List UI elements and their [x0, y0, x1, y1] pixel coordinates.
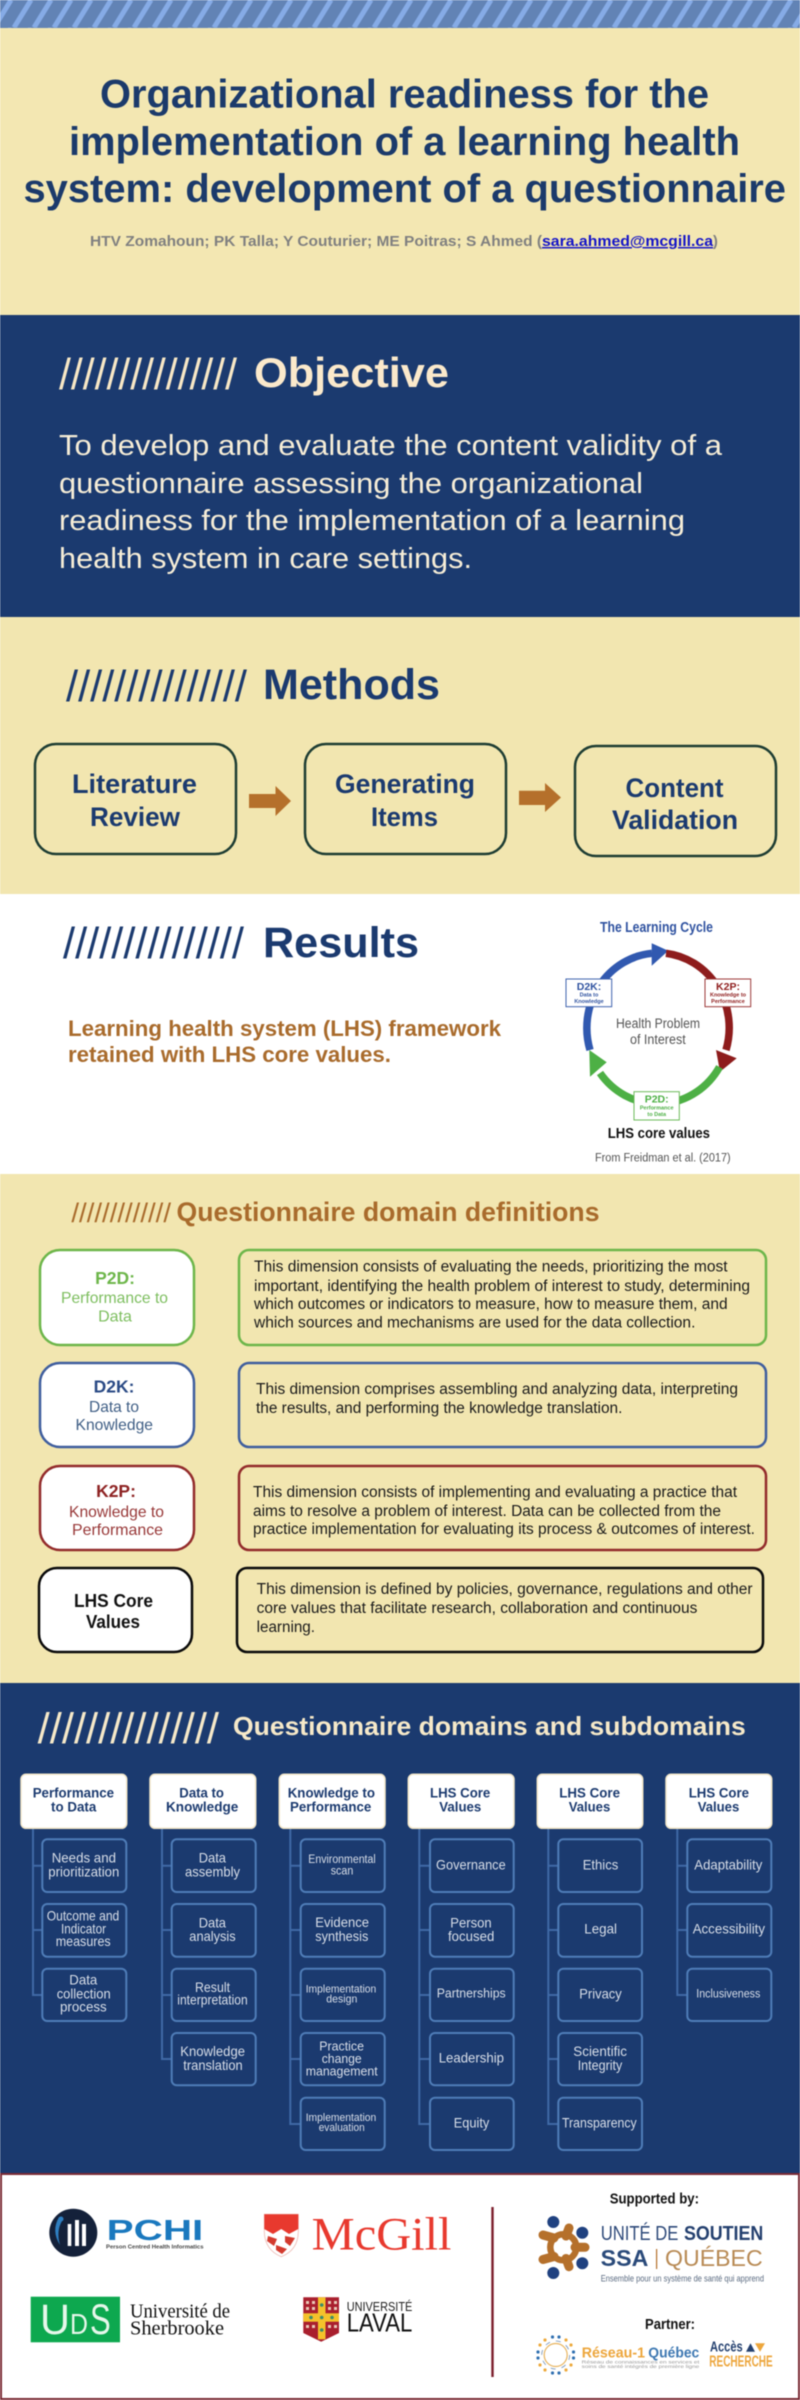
- definition text: LHS core values: [237, 1568, 763, 1652]
- column: data to knowledge: analysis: [189, 1928, 236, 1944]
- column: knowledge to performance: Knowledge to: [288, 1786, 375, 1800]
- column: data to knowledge: Data to: [179, 1786, 224, 1800]
- heading: domains: ///////////////: [38, 1705, 219, 1753]
- diagram: the learning cycle: D2K:: [577, 981, 601, 993]
- heading: objective: ///////////////: [59, 350, 238, 399]
- diagram: the learning cycle: [566, 920, 751, 1120]
- column: LHS core values 2: [537, 1774, 643, 2150]
- caption: LHS core values: [595, 1126, 731, 1165]
- caption: LHS core values: From Freidman et al. (2017): [595, 1153, 731, 1165]
- step: generating items: Items: [371, 802, 438, 832]
- column: performance to data: measures: [56, 1933, 111, 1949]
- title: system: development of a questionnaire: [24, 167, 786, 211]
- column: LHS core values 1: [408, 1774, 514, 2150]
- heading: methods: Methods: [263, 661, 440, 709]
- column: knowledge to performance: Environmental: [308, 1854, 376, 1866]
- divider: [491, 2207, 494, 2377]
- heading: results: Results: [263, 919, 419, 967]
- column: knowledge to performance: Implementation: [306, 2112, 376, 2124]
- authors: ): [713, 234, 718, 250]
- definition label: D2K: Data to: [89, 1399, 139, 1416]
- column: knowledge to performance: scan: [331, 1866, 353, 1878]
- column: LHS core values 1: LHS Core: [430, 1786, 491, 1800]
- logo: Université Laval: UNIVERSITÉ: [347, 2299, 413, 2314]
- objective text: health system in care settings.: [59, 543, 472, 575]
- column: LHS core values 1: Governance: [436, 1856, 506, 1872]
- definition text: LHS core values: learning.: [257, 1619, 315, 1636]
- logo: Université de Sherbrooke: S: [90, 2296, 111, 2344]
- diagram: the learning cycle: Knowledge: [574, 999, 604, 1005]
- panel: footer logos: [1, 2174, 799, 2399]
- logo: Réseau-1 Québec: soins de santé intégrés de première ligne: [582, 2364, 700, 2369]
- definition text: LHS core values: core values that facilitate research, collaboration and continuous: [257, 1600, 698, 1617]
- step: content validation: [575, 746, 776, 856]
- column: knowledge to performance: design: [326, 1994, 357, 2006]
- definition text: P2D: [239, 1250, 766, 1345]
- definition text: D2K: [239, 1363, 766, 1447]
- diagram: the learning cycle: P2D:: [645, 1094, 669, 1106]
- column: LHS core values 2: Ethics: [583, 1856, 618, 1872]
- logo: Université de Sherbrooke: Université de: [130, 2300, 230, 2322]
- arrow: [249, 786, 291, 816]
- diagram: the learning cycle: Performance: [711, 999, 745, 1005]
- column: LHS core values 2: LHS Core: [559, 1786, 620, 1800]
- logo: Réseau-1 Québec: Réseau-1: [582, 2345, 645, 2362]
- logo: Accès Recherche: Accès: [710, 2339, 743, 2356]
- diagram: the learning cycle: Data to: [580, 992, 599, 998]
- title: implementation of a learning health: [69, 120, 740, 164]
- top stripe band: [0, 0, 800, 28]
- panel: methods: [0, 617, 800, 894]
- heading: objective: [59, 349, 449, 399]
- column: LHS core values 1: Values: [439, 1800, 481, 1815]
- diagram: the learning cycle: Health Problem: [616, 1016, 700, 1031]
- definition text: D2K: This dimension comprises assembling and analyzing data, interpreting: [256, 1381, 738, 1398]
- column: LHS core values 3: LHS Core: [689, 1786, 749, 1800]
- definition label: P2D: P2D:: [95, 1268, 135, 1288]
- column: LHS core values 1: focused: [448, 1928, 494, 1944]
- authors: sara.ahmed@mcgill.ca: [542, 234, 714, 250]
- diagram: the learning cycle: K2P:: [716, 981, 740, 993]
- definition text: K2P: aims to resolve a problem of interest. Data can be collected from the: [253, 1503, 721, 1520]
- logo: Université de Sherbrooke: U: [40, 2296, 70, 2344]
- authors: [90, 234, 718, 250]
- column: performance to data: Performance: [33, 1786, 114, 1800]
- panel: objective: [0, 315, 800, 617]
- authors: HTV Zomahoun; PK Talla; Y Couturier; ME Poitras; S Ahmed (: [90, 234, 542, 250]
- label: supported by: Supported by:: [610, 2191, 699, 2207]
- column: knowledge to performance: [279, 1774, 385, 2150]
- diagram: the learning cycle: of Interest: [630, 1032, 686, 1047]
- diagram: the learning cycle: Performance: [640, 1106, 674, 1112]
- heading: objective: Objective: [254, 349, 449, 396]
- heading: definitions: /////////////: [71, 1198, 171, 1228]
- column: performance to data: process: [60, 1999, 107, 2015]
- heading: results: ///////////////: [63, 919, 245, 968]
- logo: McGill: McGill: [312, 2208, 452, 2260]
- column: data to knowledge: Data: [199, 1914, 226, 1930]
- column: performance to data: [21, 1774, 127, 2021]
- logo: Accès Recherche: [709, 2339, 773, 2371]
- definition text: P2D: This dimension consists of evaluating the needs, prioritizing the most: [254, 1259, 728, 1276]
- logo: PCHI: Person Centred Health Informatics: [106, 2245, 204, 2251]
- column: LHS core values 1: Equity: [454, 2114, 489, 2130]
- results text: Learning health system (LHS) framework: [68, 1016, 501, 1041]
- definition label: LHS core values: LHS Core: [74, 1591, 153, 1611]
- definition label: LHS core values: Values: [86, 1612, 140, 1632]
- column: LHS core values 3: Accessibility: [693, 1921, 765, 1937]
- definition label: D2K: [40, 1363, 194, 1447]
- panel: results: [0, 894, 800, 1174]
- objective text: readiness for the implementation of a learning: [59, 505, 685, 537]
- definition label: K2P: K2P:: [96, 1481, 136, 1501]
- definition label: K2P: Performance: [72, 1522, 163, 1539]
- diagram: the learning cycle: to Data: [647, 1112, 667, 1118]
- column: LHS core values 1: Partnerships: [437, 1986, 506, 2001]
- definition text: P2D: which sources and mechanisms are used for the data collection.: [253, 1315, 695, 1332]
- definition label: LHS core values: [39, 1568, 192, 1652]
- step: generating items: Generating: [335, 769, 475, 799]
- definition text: K2P: practice implementation for evaluating its process & outcomes of interest.: [253, 1521, 755, 1538]
- panel: title: [0, 28, 800, 315]
- diagram: the learning cycle: Knowledge to: [710, 992, 747, 998]
- column: data to knowledge: assembly: [185, 1864, 240, 1880]
- heading: domains: [38, 1705, 746, 1753]
- definition label: K2P: Knowledge to: [69, 1504, 164, 1521]
- definition text: K2P: [239, 1466, 766, 1550]
- column: LHS core values 3: [666, 1774, 772, 2021]
- column: LHS core values 1: Leadership: [439, 2050, 504, 2066]
- step: content validation: Content: [626, 773, 724, 803]
- step: literature review: [35, 744, 236, 854]
- heading: domains: Questionnaire domains and subdomains: [233, 1713, 746, 1741]
- logo: unité de soutien SSA Québec: SOUTIEN: [684, 2223, 763, 2245]
- column: performance to data: prioritization: [48, 1864, 119, 1880]
- caption: LHS core values: LHS core values: [608, 1126, 710, 1142]
- column: data to knowledge: Knowledge: [180, 2043, 245, 2059]
- logo: PCHI: [49, 2209, 204, 2257]
- step: content validation: Validation: [612, 805, 738, 835]
- logo: unité de soutien SSA Québec: UNITÉ DE: [601, 2222, 678, 2245]
- logo: Université de Sherbrooke: D: [70, 2309, 88, 2341]
- logo: Réseau-1 Québec: Réseau de connaissances en services et: [582, 2359, 700, 2364]
- column: LHS core values 2: Values: [569, 1800, 610, 1815]
- column: data to knowledge: Knowledge: [166, 1800, 239, 1815]
- definition text: LHS core values: This dimension is defined by policies, governance, regulations and other: [257, 1581, 753, 1598]
- column: performance to data: to Data: [51, 1800, 97, 1815]
- heading: methods: ///////////////: [66, 662, 248, 711]
- column: knowledge to performance: Practice: [319, 2039, 364, 2054]
- step: literature review: Literature: [72, 769, 197, 799]
- panel: questionnaire domains and subdomains: [0, 1683, 800, 2173]
- objective text: questionnaire assessing the organizational: [59, 468, 643, 500]
- column: LHS core values 2: Scientific: [573, 2043, 627, 2059]
- objective text: [59, 430, 723, 575]
- column: LHS core values 2: Integrity: [578, 2057, 622, 2073]
- column: knowledge to performance: change: [322, 2051, 362, 2066]
- column: performance to data: Data: [69, 1971, 97, 1987]
- panel: questionnaire domain definitions: [0, 1174, 800, 1683]
- column: LHS core values 3: Inclusiveness: [696, 1988, 761, 2000]
- title: Organizational readiness for the: [100, 72, 709, 116]
- column: data to knowledge: translation: [183, 2057, 243, 2073]
- logo: unité de soutien SSA Québec: SSA: [601, 2245, 648, 2271]
- step: literature review: Review: [90, 802, 180, 832]
- logo: unité de soutien SSA Québec: [543, 2216, 764, 2285]
- column: performance to data: Needs and: [52, 1850, 116, 1866]
- heading: definitions: Questionnaire domain definitions: [176, 1197, 600, 1227]
- logo: Université de Sherbrooke: Sherbrooke: [130, 2317, 224, 2339]
- definition label: P2D: Performance to: [61, 1290, 168, 1307]
- logo: Université Laval: LAVAL: [347, 2310, 412, 2338]
- heading: results: [63, 919, 419, 968]
- definition text: P2D: which outcomes or indicators to measure, how to measure them, and: [253, 1296, 728, 1313]
- heading: methods: [66, 661, 440, 711]
- column: knowledge to performance: Performance: [290, 1800, 372, 1815]
- column: performance to data: Indicator: [61, 1920, 106, 1936]
- column: performance to data: Outcome and: [47, 1908, 119, 1924]
- logo: unité de soutien SSA Québec: QUÉBEC: [665, 2245, 763, 2271]
- arrow: [519, 783, 561, 812]
- logo: PCHI: PCHI: [107, 2215, 203, 2247]
- objective text: To develop and evaluate the content validity of a: [59, 430, 723, 462]
- column: data to knowledge: Data: [199, 1850, 226, 1866]
- diagram: the learning cycle: The Learning Cycle: [600, 920, 713, 936]
- column: data to knowledge: [150, 1774, 256, 2085]
- definition label: P2D: Data: [98, 1309, 132, 1326]
- logo: Réseau-1 Québec: Québec: [648, 2345, 699, 2362]
- column: LHS core values 3: Adaptability: [694, 1856, 762, 1872]
- definition text: D2K: the results, and performing the knowledge translation.: [256, 1400, 622, 1417]
- definition label: D2K: Knowledge: [76, 1417, 153, 1434]
- definition label: K2P: [40, 1466, 194, 1550]
- column: data to knowledge: Result: [195, 1979, 230, 1995]
- results text: retained with LHS core values.: [68, 1042, 391, 1067]
- title: [24, 72, 786, 211]
- column: LHS core values 2: Legal: [584, 1921, 617, 1937]
- results text: [68, 1016, 501, 1067]
- logo: Université Laval: [303, 2297, 413, 2342]
- logo: Réseau-1 Québec: [536, 2335, 700, 2375]
- definition label: D2K: D2K:: [94, 1377, 134, 1397]
- logo: Université de Sherbrooke: [31, 2296, 230, 2344]
- column: knowledge to performance: Evidence: [315, 1914, 369, 1930]
- column: performance to data: collection: [57, 1985, 111, 2001]
- definition text: K2P: This dimension consists of implementing and evaluating a practice that: [253, 1484, 738, 1501]
- column: LHS core values 2: Privacy: [579, 1985, 622, 2001]
- step: generating items: [305, 744, 506, 854]
- column: LHS core values 3: Values: [698, 1800, 739, 1815]
- label: partner: Partner:: [645, 2317, 695, 2333]
- definition label: P2D: [40, 1250, 194, 1345]
- column: knowledge to performance: management: [306, 2063, 378, 2078]
- definition text: P2D: important, identifying the health problem of interest to study, determining: [254, 1278, 750, 1295]
- column: LHS core values 1: Person: [450, 1914, 492, 1930]
- column: knowledge to performance: synthesis: [315, 1928, 368, 1944]
- column: knowledge to performance: evaluation: [319, 2122, 365, 2134]
- column: data to knowledge: interpretation: [177, 1991, 248, 2007]
- column: LHS core values 2: Transparency: [562, 2115, 637, 2130]
- column: knowledge to performance: Implementation: [306, 1984, 376, 1996]
